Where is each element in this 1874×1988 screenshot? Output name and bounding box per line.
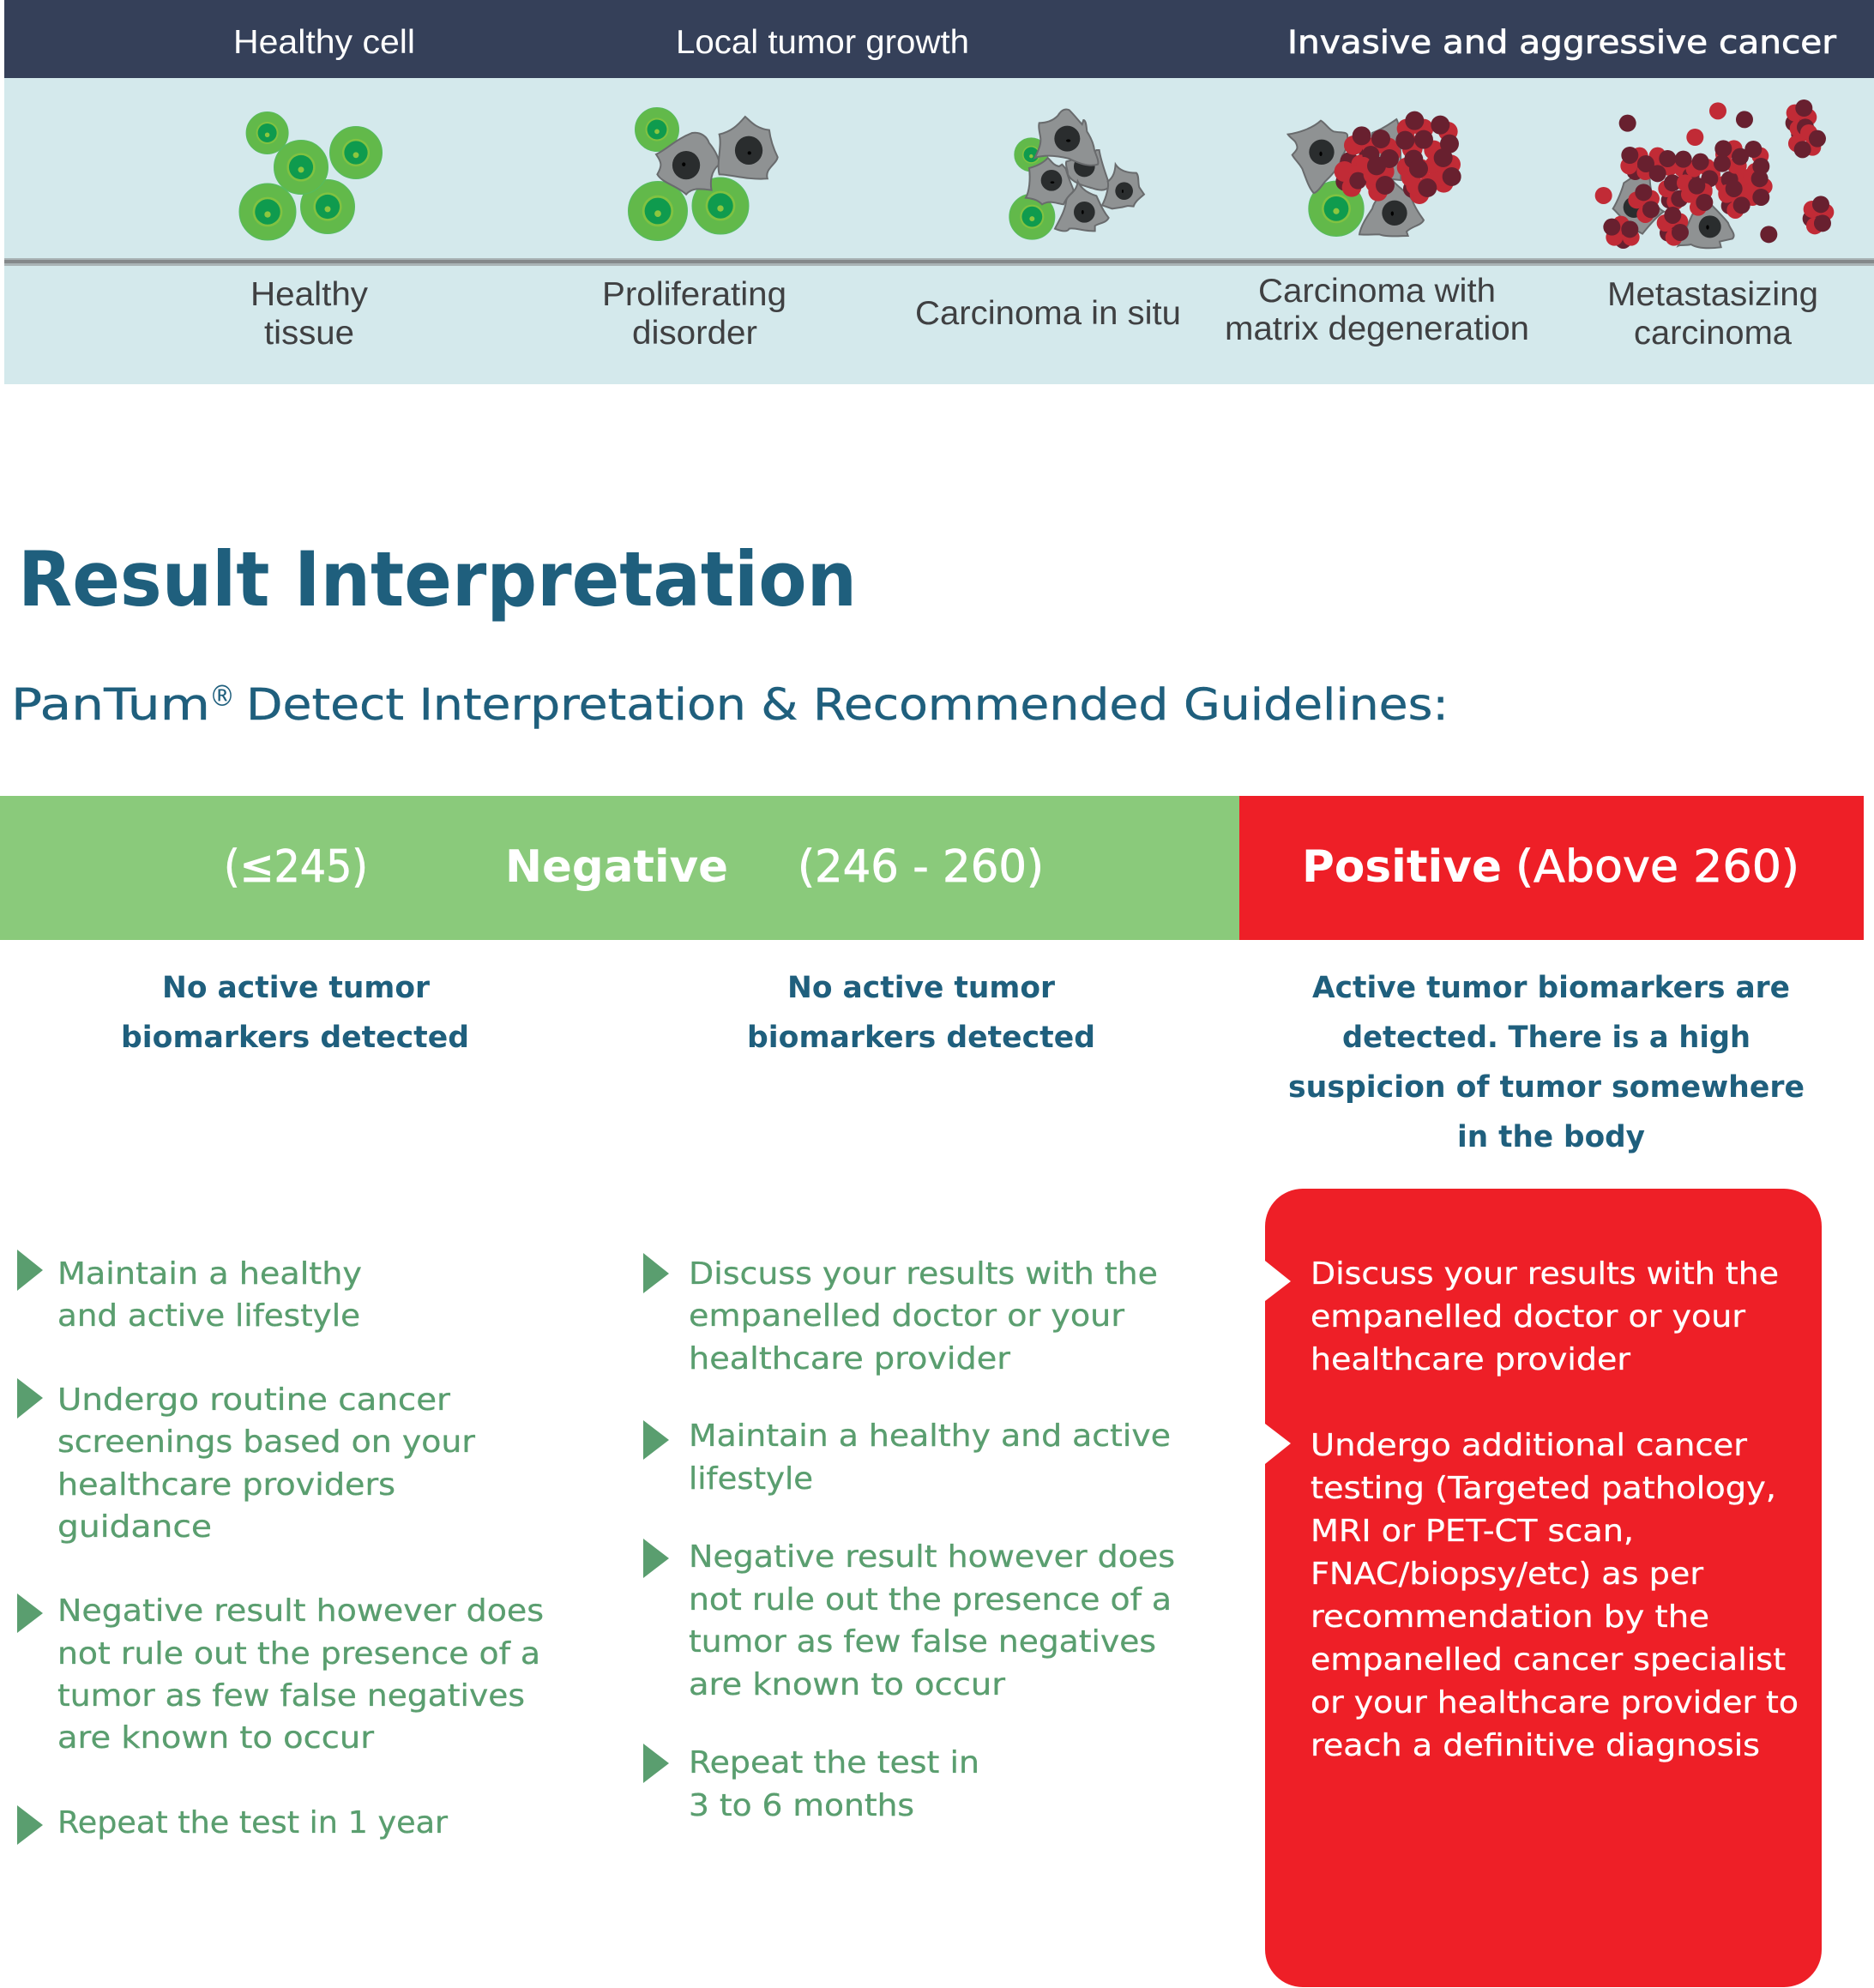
bullet: routine screening (17, 1378, 475, 1545)
negative label: Negative (505, 841, 728, 893)
header band (4, 0, 1874, 78)
bullet: discuss results: Discuss your results with the (689, 1256, 1158, 1292)
bullet: repeat in 3 to 6 months: 3 to 6 months (689, 1788, 914, 1823)
header: local tumor growth: Local tumor growth (676, 24, 969, 61)
bullet: maintain lifestyle (643, 1419, 1171, 1497)
bullet: repeat in 3 to 6 months (643, 1744, 979, 1823)
band: positive range (1239, 796, 1864, 940)
label: metastasizing carcinoma: Metastasizing (1607, 276, 1818, 313)
range: above 260: (Above 260) (1515, 841, 1799, 893)
label: healthy tissue (250, 276, 369, 352)
bullet: additional testing: or your healthcare provider to (1311, 1685, 1799, 1720)
bullet: additional testing: Undergo additional cancer (1311, 1428, 1747, 1463)
bullet: maintain lifestyle: Maintain a healthy (57, 1256, 362, 1292)
positive label: Positive (1302, 841, 1502, 893)
tissue baseline (4, 258, 1874, 266)
icon: carcinoma with matrix degeneration cells (1288, 111, 1461, 236)
title: Result Interpretation (18, 535, 857, 624)
bullet: false negatives: tumor as few false negatives (689, 1624, 1156, 1660)
label: carcinoma with matrix degeneration: Carcinoma with (1258, 273, 1496, 310)
bullet: routine screening: Undergo routine cancer (57, 1383, 450, 1418)
header: invasive and aggressive cancer: Invasive and aggressive cancer (1287, 24, 1837, 61)
bullet: false negatives: are known to occur (57, 1720, 374, 1756)
bullet: routine screening: screenings based on your (57, 1425, 475, 1460)
bullet: additional testing (1265, 1424, 1799, 1763)
summary: column 2: biomarkers detected (747, 1021, 1095, 1055)
bullet: additional testing: reach a definitive diagnosis (1311, 1728, 1760, 1763)
label: carcinoma in situ: Carcinoma in situ (915, 295, 1181, 332)
header: healthy cell: Healthy cell (233, 24, 415, 61)
label: carcinoma with matrix degeneration: matrix degeneration (1225, 310, 1529, 347)
label: metastasizing carcinoma (1607, 276, 1818, 352)
bullet: false negatives: tumor as few false negatives (57, 1678, 525, 1714)
range: up to 245: (≤245) (224, 841, 368, 893)
label: carcinoma with matrix degeneration (1225, 273, 1529, 347)
bullet: additional testing: recommendation by the (1311, 1599, 1709, 1635)
bullet: routine screening: guidance (57, 1509, 212, 1545)
bullet: additional testing: empanelled cancer specialist (1311, 1642, 1786, 1678)
list: column 2 guidance (643, 1253, 1175, 1823)
bullet: false negatives: not rule out the presence of a (689, 1582, 1172, 1618)
summary: column 3 (1288, 971, 1805, 1154)
bullet: maintain lifestyle (17, 1250, 362, 1334)
summary: column 1: No active tumor (162, 971, 431, 1005)
label: metastasizing carcinoma: carcinoma (1634, 315, 1792, 352)
bullet: additional testing: FNAC/biopsy/etc) as per (1311, 1557, 1703, 1592)
label: proliferating disorder: Proliferating (602, 276, 786, 313)
bullet: additional testing: testing (Targeted pathology, (1311, 1471, 1776, 1506)
bullet: discuss results: Discuss your results with the (1311, 1256, 1779, 1292)
icon: carcinoma in situ cells (1009, 109, 1144, 239)
icon: healthy tissue cells (239, 111, 382, 240)
range: 246 to 260: (246 - 260) (798, 841, 1044, 893)
summary: column 3: in the body (1457, 1120, 1645, 1154)
bullet: false negatives (643, 1539, 1175, 1702)
label: healthy tissue: Healthy (250, 276, 369, 313)
subtitle: PanTum (11, 680, 210, 731)
bullet: false negatives: not rule out the presence of a (57, 1636, 540, 1672)
bullet: false negatives: Negative result however does (689, 1539, 1175, 1575)
band: negative range (0, 796, 1239, 940)
summary: column 2 (747, 971, 1095, 1055)
panel: positive guidance (1265, 1189, 1822, 1987)
icon: metastasizing carcinoma cells (1595, 99, 1834, 249)
list: column 1 guidance (17, 1250, 544, 1845)
subtitle: Detect Interpretation & Recommended Guidelines: (246, 680, 1449, 731)
bullet: maintain lifestyle: lifestyle (689, 1461, 813, 1497)
icon: proliferating disorder cells (629, 108, 778, 240)
bullet: repeat in one year: Repeat the test in 1 year (57, 1805, 448, 1840)
label: proliferating disorder: disorder (632, 315, 757, 352)
summary: column 3: suspicion of tumor somewhere (1288, 1070, 1805, 1105)
bullet: false negatives: are known to occur (689, 1667, 1005, 1702)
bullet: additional testing: MRI or PET-CT scan, (1311, 1514, 1634, 1549)
bullet: false negatives (17, 1593, 544, 1756)
bullet: routine screening: healthcare providers (57, 1467, 395, 1503)
bullet: discuss results (1265, 1256, 1779, 1377)
label: healthy tissue: tissue (264, 315, 354, 352)
bullet: false negatives: Negative result however does (57, 1593, 544, 1629)
bullet: discuss results: healthcare provider (1311, 1342, 1630, 1377)
summary: column 2: No active tumor (787, 971, 1056, 1005)
subtitle: ® (209, 679, 235, 714)
bullet: discuss results (643, 1253, 1158, 1377)
bullet: maintain lifestyle: Maintain a healthy and active (689, 1419, 1171, 1454)
bullet: discuss results: healthcare provider (689, 1341, 1010, 1377)
summary: column 1 (121, 971, 469, 1055)
panel: cancer progression (4, 0, 1874, 384)
bullet: repeat in 3 to 6 months: Repeat the test in (689, 1745, 979, 1780)
summary: column 1: biomarkers detected (121, 1021, 469, 1055)
summary: column 3: detected. There is a high (1342, 1021, 1750, 1055)
bullet: maintain lifestyle: and active lifestyle (57, 1298, 360, 1334)
label: proliferating disorder (602, 276, 786, 352)
summary: column 3: Active tumor biomarkers are (1312, 971, 1790, 1005)
bullet: discuss results: empanelled doctor or your (689, 1298, 1124, 1334)
bullet: discuss results: empanelled doctor or your (1311, 1299, 1745, 1334)
